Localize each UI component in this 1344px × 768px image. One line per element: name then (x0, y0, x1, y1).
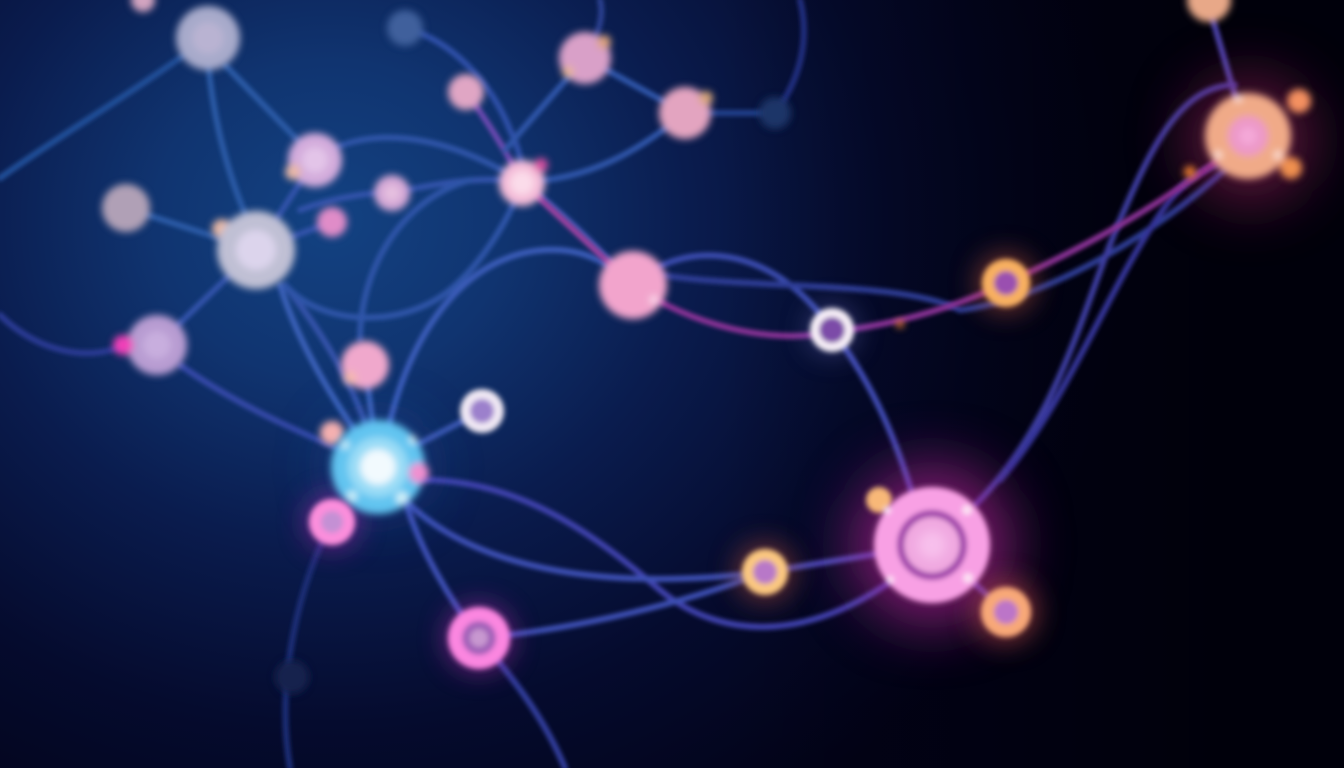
peach ring node (981, 587, 1031, 637)
glow halos (333, 78, 1312, 623)
gold ring node (742, 549, 788, 595)
white ring node (460, 389, 504, 433)
hub node: large pink (874, 487, 990, 603)
gold ring node (982, 259, 1030, 307)
magenta highlighted path (522, 155, 1225, 336)
pink ring node (448, 607, 510, 669)
ring nodes (309, 259, 1031, 669)
hub node: orange top right (1187, 0, 1311, 179)
small amber dot (866, 487, 892, 513)
pink ring node (309, 499, 355, 545)
white ring node (810, 308, 854, 352)
node cluster (176, 6, 240, 70)
hub node: blue (331, 420, 429, 514)
small halos (306, 255, 1036, 670)
upper-left soft nodes (102, 0, 1196, 694)
